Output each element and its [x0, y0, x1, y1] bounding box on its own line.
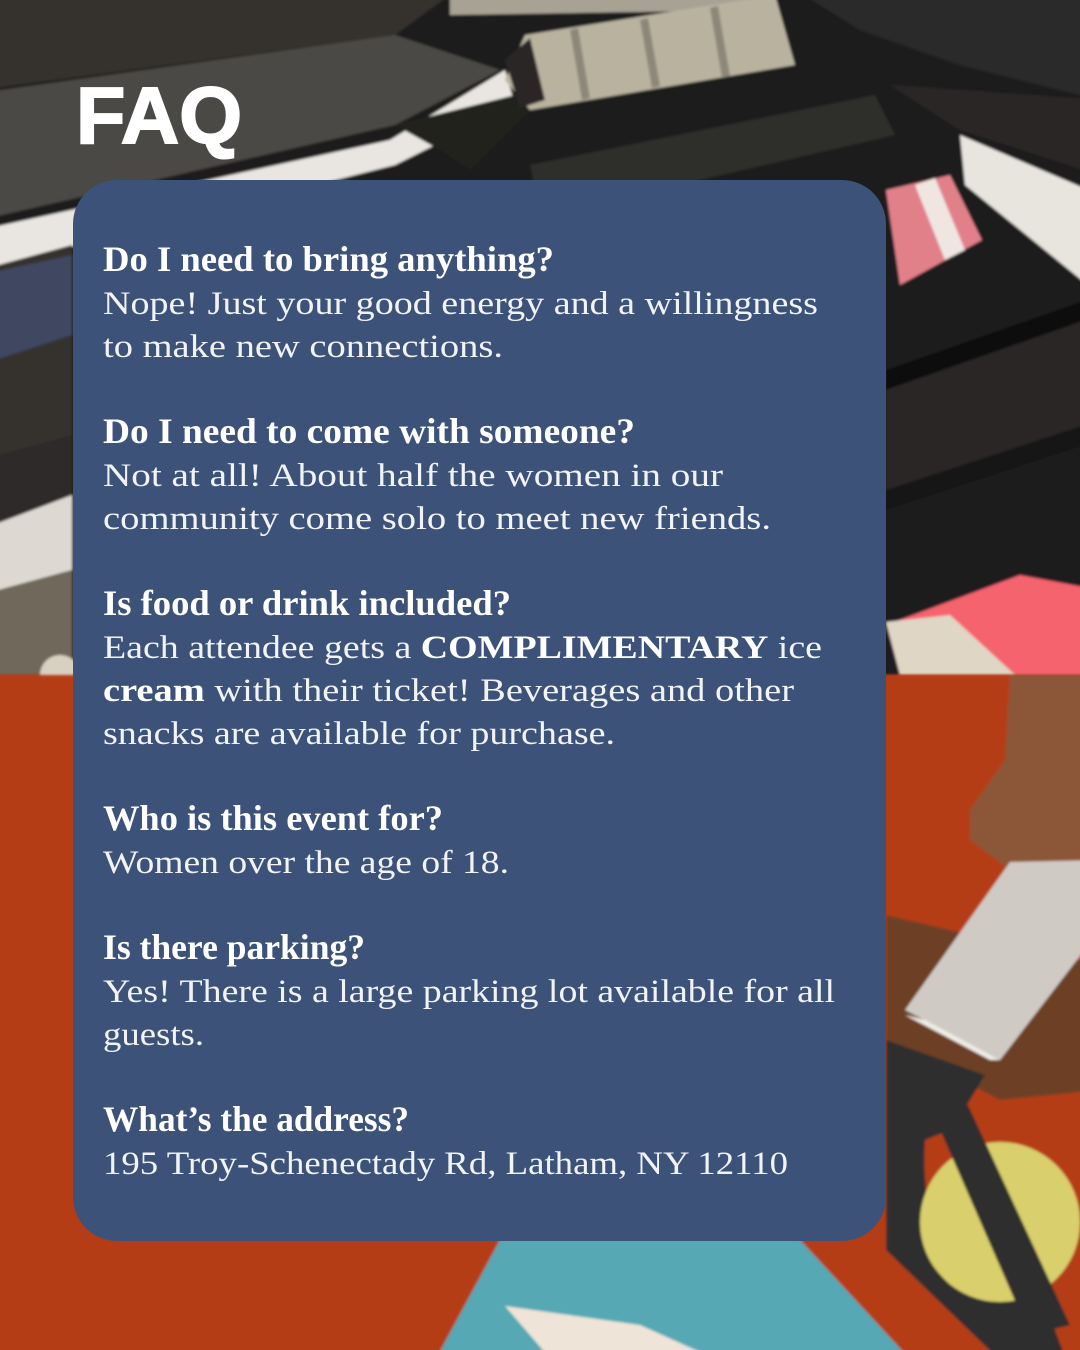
question 3	[103, 583, 822, 752]
question 4: Women over the age of 18.	[103, 845, 509, 881]
question 1	[103, 239, 818, 365]
question 2: Not at all! About half the women in our	[103, 458, 723, 494]
question 3: snacks are available for purchase.	[103, 716, 615, 752]
question 6: 195 Troy-Schenectady Rd, Latham, NY 12110	[103, 1146, 788, 1182]
background photo: paddles on dark table	[0, 0, 1080, 695]
question 2	[103, 411, 771, 537]
question 2: community come solo to meet new friends.	[103, 501, 771, 537]
question 5	[103, 927, 835, 1053]
question 5: Yes! There is a large parking lot available for all	[103, 974, 835, 1010]
question 1: Nope! Just your good energy and a willingness	[103, 286, 818, 322]
question 4: Who is this event for?	[103, 798, 443, 838]
question 6: What’s the address?	[103, 1099, 409, 1139]
panel: FAQ card	[73, 180, 886, 1241]
question 4	[103, 798, 509, 881]
question 3: Is food or drink included?	[103, 583, 511, 623]
background photo: red court with paddle, wrist and ball	[0, 675, 1080, 1350]
question 1: to make new connections.	[103, 329, 503, 365]
question 6	[103, 1099, 788, 1182]
question 5: guests.	[103, 1017, 204, 1053]
question 3: cream with their ticket! Beverages and other	[103, 673, 794, 709]
question 5: Is there parking?	[103, 927, 365, 967]
title: FAQ	[76, 71, 242, 160]
question 3: Each attendee gets a COMPLIMENTARY ice	[103, 630, 822, 666]
question 2: Do I need to come with someone?	[103, 411, 635, 451]
question 1: Do I need to bring anything?	[103, 239, 554, 279]
